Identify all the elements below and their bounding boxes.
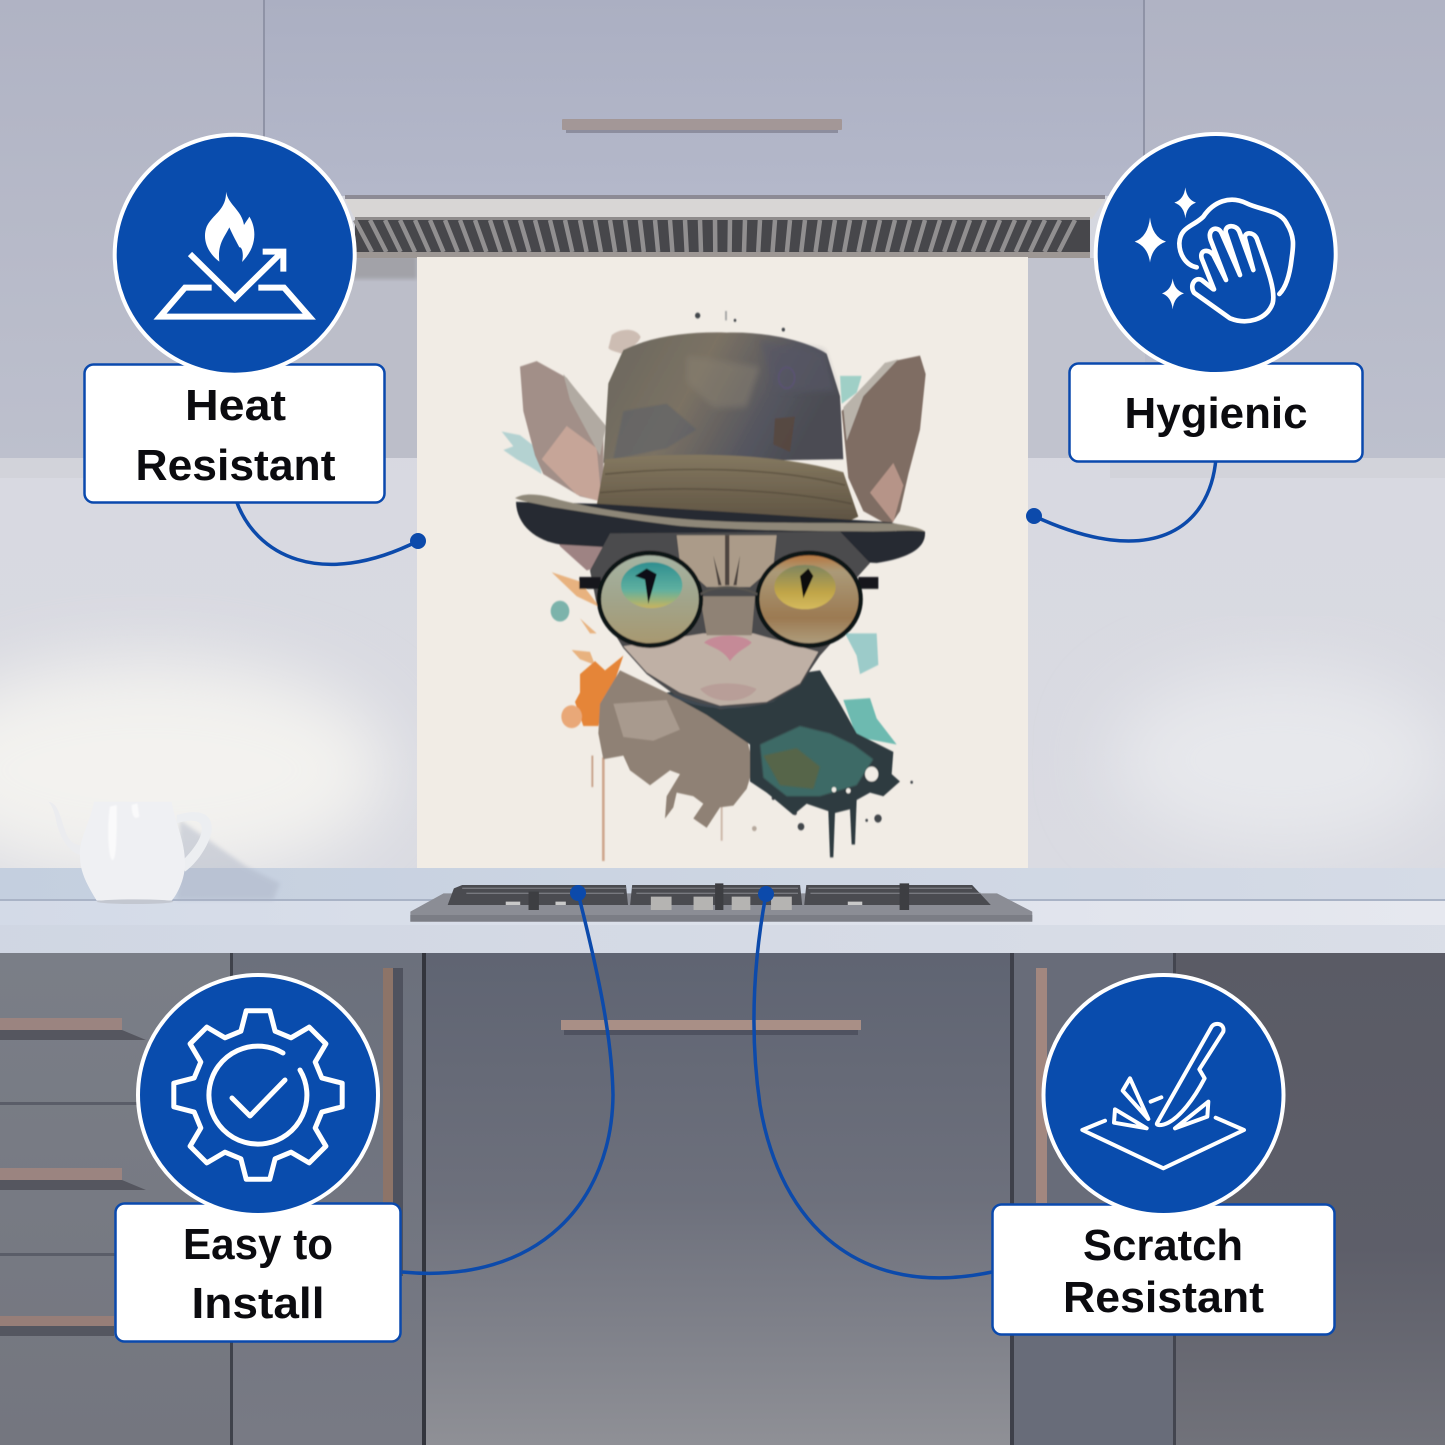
counter <box>0 868 1445 953</box>
label: Resistant <box>1063 1273 1264 1322</box>
label <box>1070 364 1362 462</box>
cabinet handle top <box>562 119 842 133</box>
teapot <box>48 802 280 904</box>
hat crown <box>603 332 843 463</box>
paint splashes <box>502 311 913 861</box>
handles <box>0 968 1047 1336</box>
dark chest <box>667 670 900 857</box>
badge: heat resistant <box>84 135 384 502</box>
icon: flame on surface <box>160 192 309 317</box>
connector dot: easy to install <box>570 885 586 901</box>
label: Heat <box>185 381 286 430</box>
badge: hygienic <box>1070 134 1362 462</box>
hat brim <box>516 502 925 563</box>
splashback panel <box>417 257 1028 868</box>
face <box>590 531 870 709</box>
label: Resistant <box>136 441 336 490</box>
badge: scratch resistant <box>992 975 1334 1334</box>
lower cabinets <box>0 953 1445 1445</box>
nose <box>704 636 752 661</box>
left chest fur <box>598 670 753 828</box>
ears <box>520 361 603 502</box>
hat band <box>597 455 858 522</box>
label <box>84 364 384 502</box>
icon: gear with check <box>174 1011 342 1179</box>
connector dot: hygienic <box>1026 508 1042 524</box>
connector: scratch resistant <box>754 894 992 1278</box>
label: Install <box>192 1279 324 1328</box>
hob <box>410 883 1032 922</box>
icon: hand wipe with sparkles <box>1135 187 1293 321</box>
muzzle <box>623 633 818 706</box>
cat illustration <box>502 311 926 861</box>
label <box>992 1204 1334 1334</box>
glasses <box>579 553 878 646</box>
icon: blade scratching surface <box>1082 1024 1244 1168</box>
connector: heat resistant <box>236 500 418 564</box>
label: Scratch <box>1083 1221 1243 1270</box>
label <box>116 1204 400 1342</box>
badge: easy to install <box>116 975 400 1342</box>
connector: easy to install <box>402 893 613 1273</box>
connector dot: heat resistant <box>410 533 426 549</box>
connector dot: scratch resistant <box>758 886 774 902</box>
connector: hygienic <box>1034 458 1216 541</box>
label: Hygienic <box>1124 389 1308 438</box>
label: Easy to <box>183 1220 333 1269</box>
extractor hood <box>345 195 1105 258</box>
